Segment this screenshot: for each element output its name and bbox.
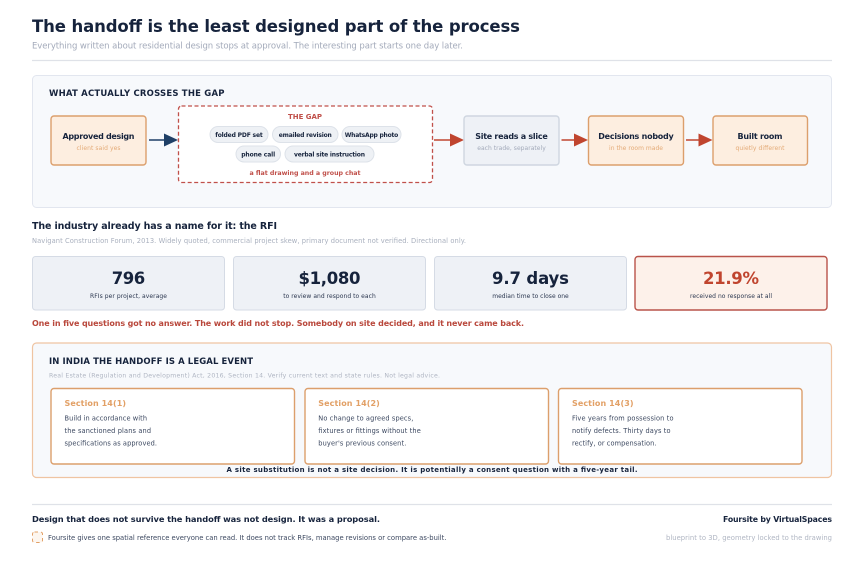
card: section 14(2): No change to agreed specs, bbox=[318, 414, 413, 422]
RFI heading: The industry already has a name for it: the RFI bbox=[32, 221, 277, 232]
chip: WhatsApp photo: WhatsApp photo bbox=[345, 132, 398, 139]
arrow: site to decisions bbox=[562, 134, 588, 146]
card: section 14(2): fixtures or fittings without the bbox=[318, 427, 421, 435]
box: decisions nobody bbox=[588, 116, 684, 165]
box: site reads a slice: Site reads a slice bbox=[475, 132, 548, 141]
chip: phone call: phone call bbox=[241, 152, 275, 158]
subtitle: Everything written about residential design stops at approval. The interesting part starts one day later. bbox=[32, 42, 463, 52]
stat card: $1,080: $1,080 bbox=[298, 269, 360, 288]
box: decisions nobody: in the room made bbox=[609, 145, 663, 152]
legal takeaway: A site substitution is not a site decision. It is potentially a consent question with a five-year tail. bbox=[226, 466, 638, 474]
stat card: 21.9%: 21.9% bbox=[703, 269, 759, 288]
box: built room: Built room bbox=[738, 132, 782, 141]
chip: folded PDF set: folded PDF set bbox=[215, 132, 263, 139]
arrow: decisions to built room bbox=[686, 134, 712, 146]
card: section 14(1): specifications as approved. bbox=[64, 440, 157, 448]
card: section 14(2): Section 14(2) bbox=[318, 399, 380, 408]
chip: verbal site instruction bbox=[285, 146, 374, 162]
box: approved design: client said yes bbox=[76, 145, 120, 152]
stat card: 9.7 days: median time to close one bbox=[492, 293, 569, 300]
card: section 14(3) bbox=[558, 388, 802, 464]
closing statement: Design that does not survive the handoff was not design. It was a proposal. bbox=[32, 514, 380, 524]
card: section 14(1) bbox=[51, 388, 294, 464]
stat card: 21.9% bbox=[635, 256, 827, 310]
card: section 14(3): notify defects. Thirty days to bbox=[572, 427, 670, 435]
arrow: gap to site bbox=[434, 134, 464, 146]
arrow: approved to gap bbox=[149, 134, 178, 146]
chip: WhatsApp photo bbox=[342, 126, 401, 142]
box: the gap bbox=[178, 106, 432, 182]
card: section 14(2) bbox=[305, 388, 548, 464]
card: section 14(1): Build in accordance with bbox=[64, 414, 147, 422]
box: built room: quietly different bbox=[736, 145, 785, 152]
footer tagline: blueprint to 3D, geometry locked to the drawing bbox=[666, 534, 832, 542]
card: section 14(3): Section 14(3) bbox=[572, 399, 634, 408]
panel heading: WHAT ACTUALLY CROSSES THE GAP bbox=[49, 89, 224, 99]
stat card: $1,080 bbox=[234, 256, 426, 310]
card: section 14(3): rectify, or compensation. bbox=[572, 440, 656, 448]
brand name: Foursite by VirtualSpaces bbox=[723, 515, 832, 524]
box: approved design bbox=[51, 116, 146, 165]
stat card: $1,080: to review and respond to each bbox=[283, 293, 376, 300]
panel: India legal event bbox=[32, 343, 832, 478]
chip: verbal site instruction: verbal site instruction bbox=[294, 152, 365, 158]
stat card: 9.7 days bbox=[434, 256, 626, 310]
card: section 14(1): Section 14(1) bbox=[64, 399, 126, 408]
stat card: 21.9%: received no response at all bbox=[690, 293, 772, 300]
box: site reads a slice: each trade, separately bbox=[477, 145, 546, 152]
chip: emailed revision bbox=[272, 126, 338, 142]
stat card: 9.7 days: 9.7 days bbox=[492, 269, 569, 288]
gap caption: a flat drawing and a group chat bbox=[250, 170, 360, 177]
box: approved design: Approved design bbox=[62, 132, 135, 141]
stat card: 796: 796 bbox=[112, 269, 145, 288]
card: section 14(1): the sanctioned plans and bbox=[64, 427, 151, 435]
RFI source note: Navigant Construction Forum, 2013. Widely quoted, commercial project skew, primary document not verified. Directional only. bbox=[32, 237, 466, 245]
icon: dashed square bbox=[32, 532, 42, 542]
panel: what actually crosses the gap bbox=[32, 76, 832, 208]
title: The handoff is the least designed part of the process bbox=[32, 17, 520, 36]
box: built room bbox=[713, 116, 808, 165]
gap title: THE GAP bbox=[288, 113, 322, 121]
footer note: Foursite gives one spatial reference everyone can read. It does not track RFIs, manage revisions or compare as-built. bbox=[48, 534, 446, 542]
stat card: 796: RFIs per project, average bbox=[90, 293, 167, 300]
chip: emailed revision: emailed revision bbox=[279, 132, 332, 139]
legal note: Real Estate (Regulation and Development) Act, 2016, Section 14. Verify current text and state rules. Not legal advice. bbox=[49, 372, 440, 380]
chip: folded PDF set bbox=[210, 126, 268, 142]
box: decisions nobody: Decisions nobody bbox=[598, 132, 675, 141]
card: section 14(3): Five years from possession to bbox=[572, 414, 674, 422]
chip: phone call bbox=[236, 146, 280, 162]
stat card: 796 bbox=[32, 256, 224, 310]
box: site reads a slice bbox=[464, 116, 559, 165]
RFI takeaway: One in five questions got no answer. The work did not stop. Somebody on site decided, and it never came back. bbox=[32, 319, 524, 328]
panel heading: IN INDIA THE HANDOFF IS A LEGAL EVENT bbox=[49, 357, 253, 367]
card: section 14(2): buyer's previous consent. bbox=[318, 440, 406, 448]
